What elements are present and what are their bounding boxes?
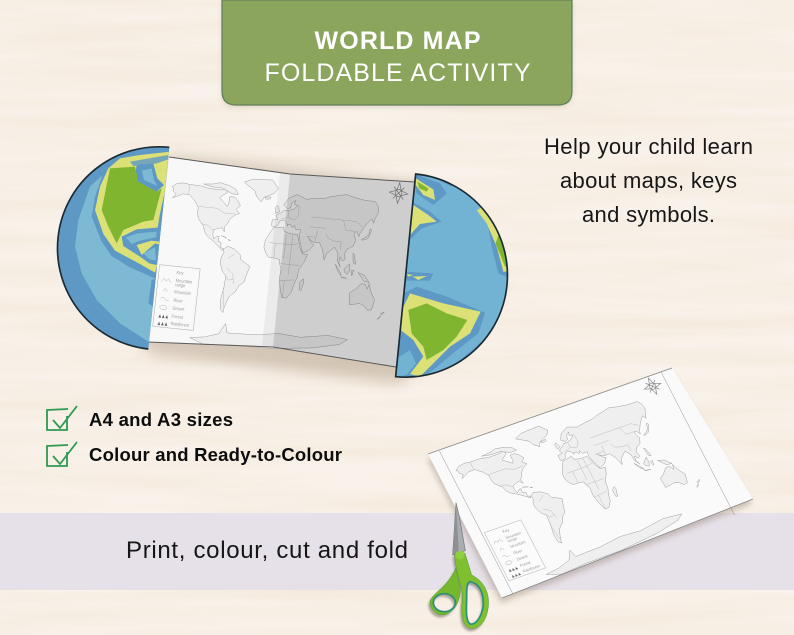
map key: River <box>173 297 184 304</box>
sheet key: Forest <box>519 559 532 568</box>
map key: Key <box>176 270 185 276</box>
checklist <box>47 406 342 466</box>
sheet compass rose <box>640 375 665 397</box>
help text: Help your child learn <box>544 134 753 159</box>
check icon 1 <box>47 406 77 430</box>
help text: about maps, keys <box>560 168 737 193</box>
scissors <box>428 503 489 631</box>
map key: Forest <box>171 313 184 320</box>
item 1: A4 and A3 sizes <box>89 409 233 430</box>
right globe half <box>393 170 510 380</box>
help text: and symbols. <box>582 202 715 227</box>
title banner <box>222 0 572 107</box>
left globe half <box>53 143 173 353</box>
map key: Mountain <box>174 289 192 296</box>
handles <box>428 551 489 631</box>
folded sheet <box>148 157 415 367</box>
sheet key: Key <box>501 527 510 534</box>
sheet key: range <box>506 535 519 543</box>
sheet key: Mountain <box>509 539 526 549</box>
map key: Mountain <box>175 278 193 285</box>
sheet key: Desert <box>516 553 529 562</box>
band caption: Print, colour, cut and fold <box>126 537 408 564</box>
map key: range <box>175 282 186 288</box>
blades <box>453 503 465 555</box>
item 2: Colour and Ready-to-Colour <box>89 444 342 465</box>
title line 2: FOLDABLE ACTIVITY <box>264 59 531 87</box>
sheet key: Mountain <box>504 530 522 540</box>
help text <box>544 134 753 227</box>
map key <box>153 265 200 330</box>
folded map <box>53 143 510 384</box>
sheet key <box>484 520 546 581</box>
compass rose <box>388 182 409 204</box>
purple band <box>0 513 794 590</box>
title line 1: WORLD MAP <box>314 27 480 55</box>
check icon 2 <box>47 442 77 466</box>
map key: Rainforest <box>170 321 190 328</box>
map key: Desert <box>172 305 185 312</box>
flat map sheet <box>427 368 753 603</box>
sheet key: River <box>512 548 524 555</box>
sheet key: Rainforest <box>522 563 542 574</box>
